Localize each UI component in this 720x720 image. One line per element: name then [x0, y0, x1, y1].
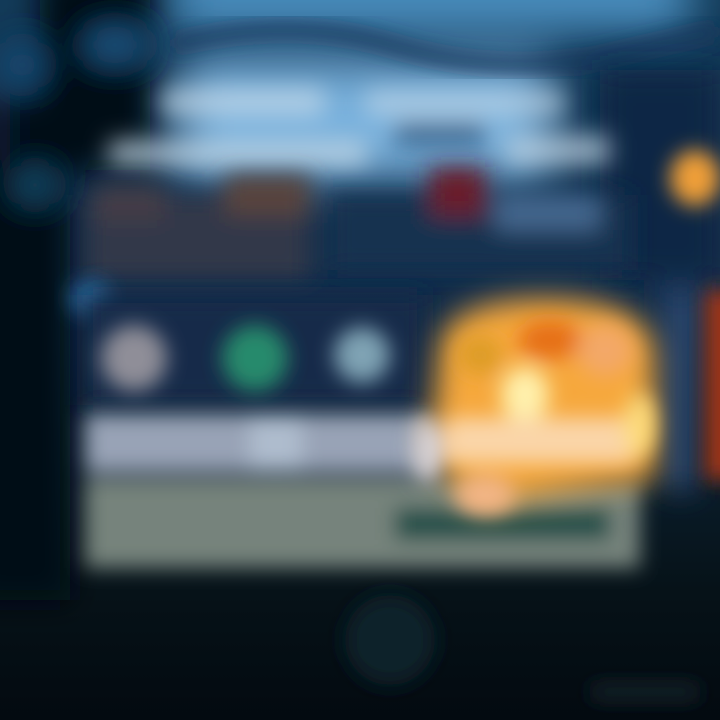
- orange lamp: [670, 150, 720, 206]
- right building: [600, 70, 720, 490]
- orange panel highlights: [414, 320, 656, 515]
- small blue accent: [70, 280, 110, 316]
- circle icon: pale blue: [334, 327, 390, 383]
- circle icon: grey: [101, 325, 167, 391]
- circle icon: green: [222, 325, 288, 391]
- red vertical panel: [705, 290, 720, 480]
- tree on left: [0, 0, 150, 600]
- lower light panel: [85, 414, 640, 568]
- middle band: [85, 295, 425, 405]
- title text band: [108, 88, 610, 166]
- roof beams: [170, 30, 720, 65]
- upper panel row: [85, 168, 630, 280]
- orange glowing panel: [430, 298, 655, 505]
- sky: [170, 0, 690, 180]
- footer mark: [345, 595, 700, 698]
